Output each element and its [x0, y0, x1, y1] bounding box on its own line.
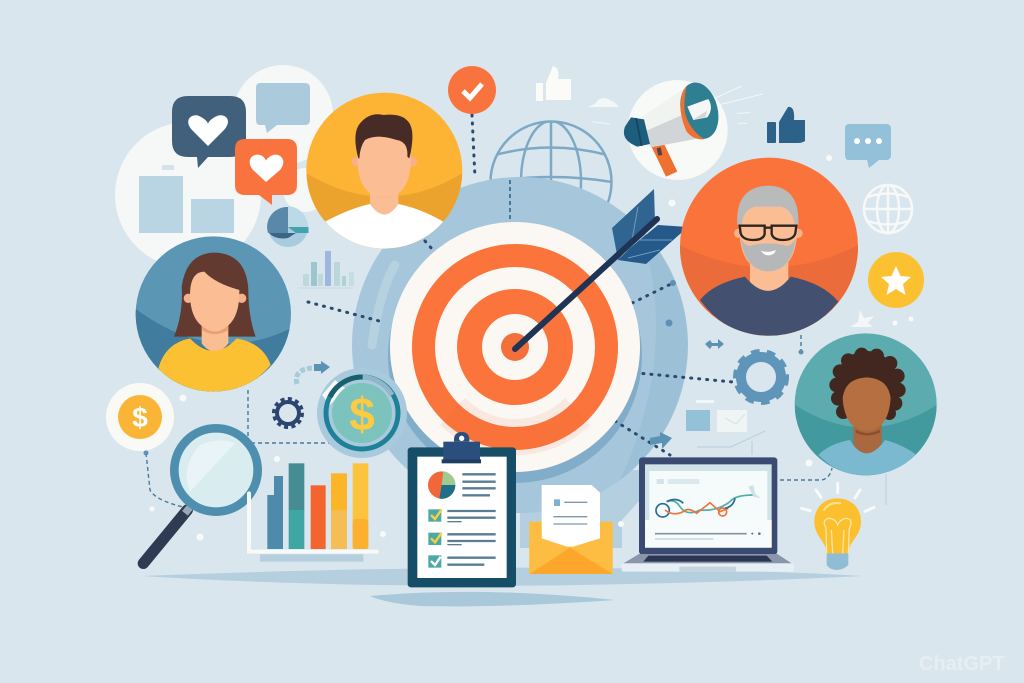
icon: light speech bubble: [256, 83, 310, 133]
icon: chat bubble with dots: [845, 124, 891, 168]
icon: globe: [489, 120, 613, 203]
avatar: woman on blue: [135, 236, 291, 393]
laptop screen chart: [656, 495, 753, 517]
icon: pie chart: [267, 206, 308, 247]
icon: blue thumbs up: [767, 107, 805, 143]
node dots: [144, 280, 804, 456]
icon: envelope: [529, 485, 613, 574]
white background bubbles: [115, 65, 333, 268]
thin outline connectors: [697, 431, 886, 505]
dashed connectors: [146, 180, 832, 507]
icon: small tiles: [686, 400, 747, 432]
icon: dark gear: [274, 399, 302, 427]
icon: arrow in target: [515, 189, 688, 349]
infographic canvas: [106, 65, 1004, 670]
clipboard pie: [428, 471, 455, 499]
icon: white globe: [864, 185, 912, 233]
decorative white dots: [150, 155, 914, 540]
icon: light bulb: [802, 483, 874, 570]
ground shadow: [142, 568, 863, 606]
icon: dark heart bubble: [172, 96, 246, 168]
watermark: ChatGPT: [919, 653, 1005, 675]
clipboard: [408, 432, 516, 587]
dotted connectors: [308, 115, 733, 455]
icon: star badge: [868, 252, 924, 308]
icon: blue gear: [737, 353, 785, 401]
mini bar chart: [298, 251, 354, 288]
icon: small dollar badge: [106, 383, 174, 451]
bulb rays: [802, 483, 874, 511]
icon: small dollar badge: $: [132, 402, 148, 433]
avatar: person with curly hair: [795, 333, 937, 477]
icon: curved arrow: [296, 361, 330, 384]
icon: dollar coin: $: [349, 388, 375, 440]
clipboard checkboxes: [428, 509, 442, 568]
avatar: man on yellow: [306, 93, 462, 252]
icon: small double arrow: [705, 339, 724, 349]
icon: orange heart bubble: [235, 139, 297, 205]
icon: white thumbs up: [536, 66, 571, 101]
icon: laptop: [622, 457, 794, 572]
bar chart: [249, 463, 377, 562]
panel: document shapes: [139, 165, 234, 233]
icon: white cloud marks: [587, 98, 619, 107]
icon: magnifying glass: [143, 428, 258, 563]
icon: megaphone: [592, 78, 763, 180]
icon: check badge: [448, 66, 496, 114]
clipboard clip: [442, 432, 481, 463]
icon: dollar coin: [317, 368, 407, 458]
icon: lower arrow: [650, 432, 672, 449]
avatar: older man with glasses: [680, 158, 858, 337]
clipboard lines: [447, 474, 496, 565]
panel: central blue disc: [352, 177, 688, 548]
icon: small white sparkle: [850, 310, 874, 327]
target: [390, 222, 640, 472]
